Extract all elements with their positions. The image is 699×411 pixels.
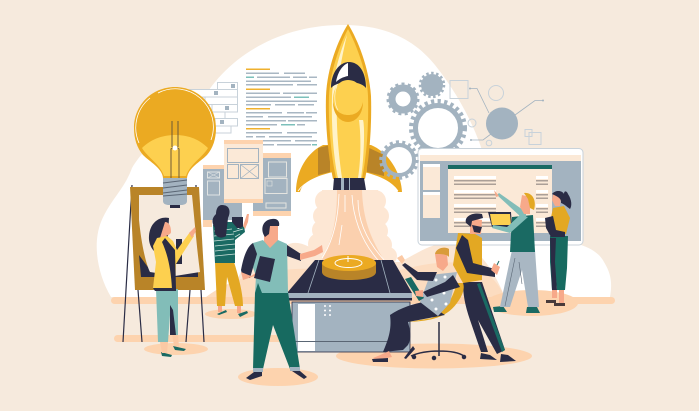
- top: [550, 206, 570, 234]
- gear: big: [412, 102, 464, 154]
- light bulb: [134, 87, 216, 208]
- launch button: [322, 255, 376, 280]
- floor shadows: [144, 290, 578, 386]
- jacket: [153, 232, 194, 288]
- person: seated woman on chair: [372, 248, 466, 362]
- person: presenter man: [241, 219, 323, 380]
- gear: lower left: [381, 142, 417, 178]
- legs: [156, 289, 178, 342]
- pants: [253, 292, 300, 369]
- rocket fins: [296, 145, 402, 192]
- arm: [456, 235, 495, 277]
- clipboard: [232, 217, 243, 228]
- rocket exhaust: [303, 190, 397, 265]
- sleeves: [287, 245, 301, 261]
- chair base: [411, 322, 466, 360]
- tablet: [254, 256, 275, 282]
- clipboard: [176, 239, 182, 264]
- person: man with tablet: [488, 190, 540, 313]
- gears: [388, 73, 464, 154]
- shoes: [546, 300, 565, 306]
- screen: centre: [224, 140, 263, 203]
- rocket window: [331, 62, 366, 88]
- shoes: [246, 371, 307, 380]
- head: [435, 254, 448, 271]
- person: woman at right: [545, 191, 571, 306]
- easel: [123, 185, 205, 342]
- screen: right: [253, 153, 291, 216]
- white background blob: [97, 25, 611, 297]
- legs: [550, 236, 568, 290]
- head: [160, 222, 171, 240]
- hair: [262, 219, 279, 237]
- neck: [264, 234, 278, 248]
- rocket: [296, 24, 402, 192]
- tablet: [488, 212, 512, 227]
- gear: top solid: [420, 73, 444, 97]
- hair: [552, 191, 571, 209]
- neck and head: [470, 218, 482, 234]
- launch pedestal: [287, 255, 412, 352]
- feet: [552, 289, 564, 303]
- floor bands: [111, 297, 615, 342]
- belt and folder: [545, 216, 565, 237]
- head: [552, 194, 561, 206]
- person: woman at easel: [149, 218, 196, 357]
- rocket nozzle: [333, 178, 366, 190]
- person: woman in stripes: [212, 205, 249, 317]
- shoes: [480, 353, 516, 362]
- hair: [212, 205, 230, 238]
- pants: [215, 262, 243, 306]
- pants: [463, 282, 505, 354]
- cap: [466, 213, 483, 227]
- gear: top left: [388, 84, 418, 114]
- monitor: [418, 148, 583, 245]
- network diagram: [450, 80, 544, 146]
- feet: [160, 334, 179, 353]
- pants: [500, 250, 539, 307]
- torso: [213, 222, 245, 263]
- legs: [383, 302, 445, 352]
- shirt: [420, 272, 457, 316]
- shirt: [251, 240, 288, 293]
- arms: [241, 264, 272, 280]
- vest: [510, 215, 535, 252]
- hair: [524, 193, 535, 210]
- hair: [149, 218, 169, 253]
- shoes: [161, 346, 186, 357]
- person: bearded man: [453, 213, 516, 362]
- flowchart boxes behind bulb: [190, 82, 238, 133]
- screen: left: [203, 165, 242, 227]
- head: [265, 226, 278, 240]
- shoes: [217, 310, 248, 317]
- arms: [402, 263, 437, 281]
- vest: [453, 233, 482, 283]
- head: [520, 195, 530, 214]
- clipboard: [405, 277, 424, 301]
- wireframe screens: [203, 140, 291, 227]
- shoes: [493, 306, 540, 313]
- hair: [435, 248, 449, 257]
- shoes: [372, 346, 415, 362]
- chair seat: [408, 283, 464, 322]
- text document lines: [246, 68, 317, 146]
- background hills: [206, 243, 505, 297]
- arm raised: [497, 193, 526, 218]
- foot: [373, 351, 392, 360]
- feet: [218, 305, 241, 313]
- arm lower: [492, 215, 528, 233]
- beard: [472, 225, 482, 233]
